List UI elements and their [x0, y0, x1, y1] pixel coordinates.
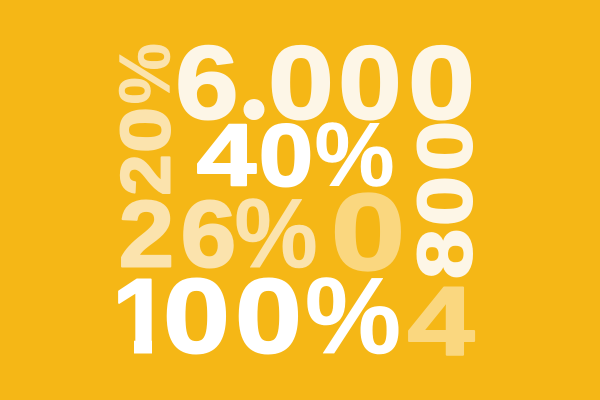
number: 100%: 0 [163, 258, 230, 376]
number: 100%: 1 [112, 258, 170, 376]
number: 800 rotated: 8 [402, 229, 488, 279]
number: 0: 0 [331, 172, 405, 294]
number: 100%: % [305, 255, 401, 377]
number: 40%: 4 [197, 106, 256, 204]
number: 6.000: . [238, 24, 270, 140]
number: 800 rotated: 0 [402, 176, 488, 226]
number: 100% [118, 277, 398, 354]
number: 6.000: 0 [338, 26, 402, 142]
number: 100%: 0 [235, 258, 302, 376]
number: 6.000: 6 [175, 26, 239, 142]
number: 800 rotated [402, 121, 488, 279]
number: 40% [197, 105, 394, 206]
number: 26%: % [234, 178, 318, 288]
number: 26%: 6 [181, 182, 236, 288]
number: 40%: % [314, 105, 394, 206]
number: 40%: 0 [259, 106, 313, 204]
number: 26% [119, 178, 318, 288]
number: 26%: 2 [119, 182, 174, 288]
number: 20% rotated: % [106, 43, 186, 104]
number: 800 rotated: 0 [402, 121, 488, 171]
number: 6.000 [178, 44, 472, 120]
number: 20% rotated [106, 43, 186, 196]
number: 6.000: 0 [408, 26, 475, 142]
number: 6.000: 0 [268, 26, 334, 142]
number: 4: 4 [408, 266, 475, 376]
number: 20% rotated: 2 [106, 154, 184, 196]
number: 20% rotated: 0 [106, 107, 184, 153]
infographic: number collage [118, 44, 476, 356]
